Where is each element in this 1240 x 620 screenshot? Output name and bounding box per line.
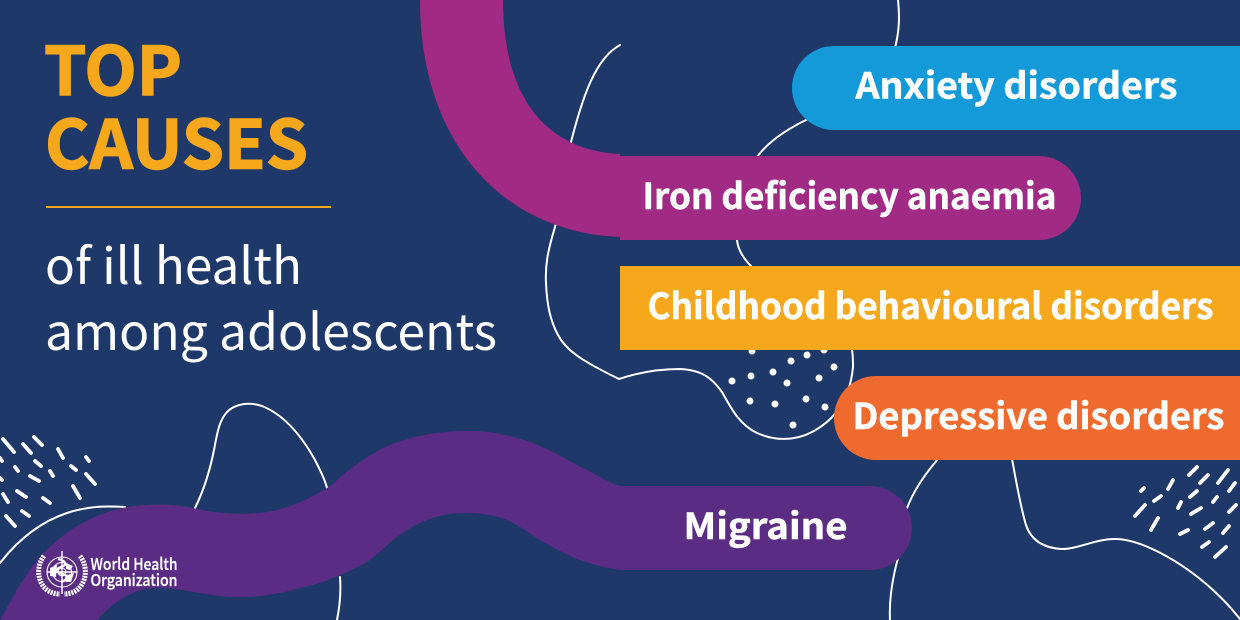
ribbon: migraine: Migraine: [684, 498, 848, 550]
ribbon: childhood behavioural disorders: [620, 266, 1240, 350]
icon: WHO emblem: [39, 551, 85, 594]
ribbon: iron deficiency anaemia: Iron deficiency anaemia: [642, 168, 1056, 220]
ribbon: migraine: [0, 431, 912, 620]
subtitle: of ill health: [45, 227, 302, 299]
WHO wordmark: Organization: [90, 567, 178, 591]
dashes pattern: left: [0, 437, 95, 526]
title: TOP: [44, 18, 182, 115]
title: CAUSES: [45, 92, 308, 188]
ribbon: childhood behavioural disorders: Childhood behavioural disorders: [648, 278, 1214, 330]
WHO wordmark: [90, 551, 178, 591]
ribbon: depressive disorders: [834, 376, 1240, 460]
ribbon: anxiety disorders: Anxiety disorders: [854, 58, 1178, 110]
ribbon: iron deficiency anaemia: [420, 0, 1081, 240]
subtitle: among adolescents: [45, 293, 497, 365]
ribbon: anxiety disorders: [792, 46, 1240, 130]
title: [44, 18, 308, 188]
dots pattern: [728, 346, 838, 428]
WHO wordmark: World Health: [90, 551, 178, 575]
ribbon: depressive disorders: Depressive disorders: [852, 388, 1224, 440]
subtitle: [45, 227, 497, 365]
WHO logo: [39, 551, 177, 594]
dashes pattern: right: [1135, 467, 1236, 557]
